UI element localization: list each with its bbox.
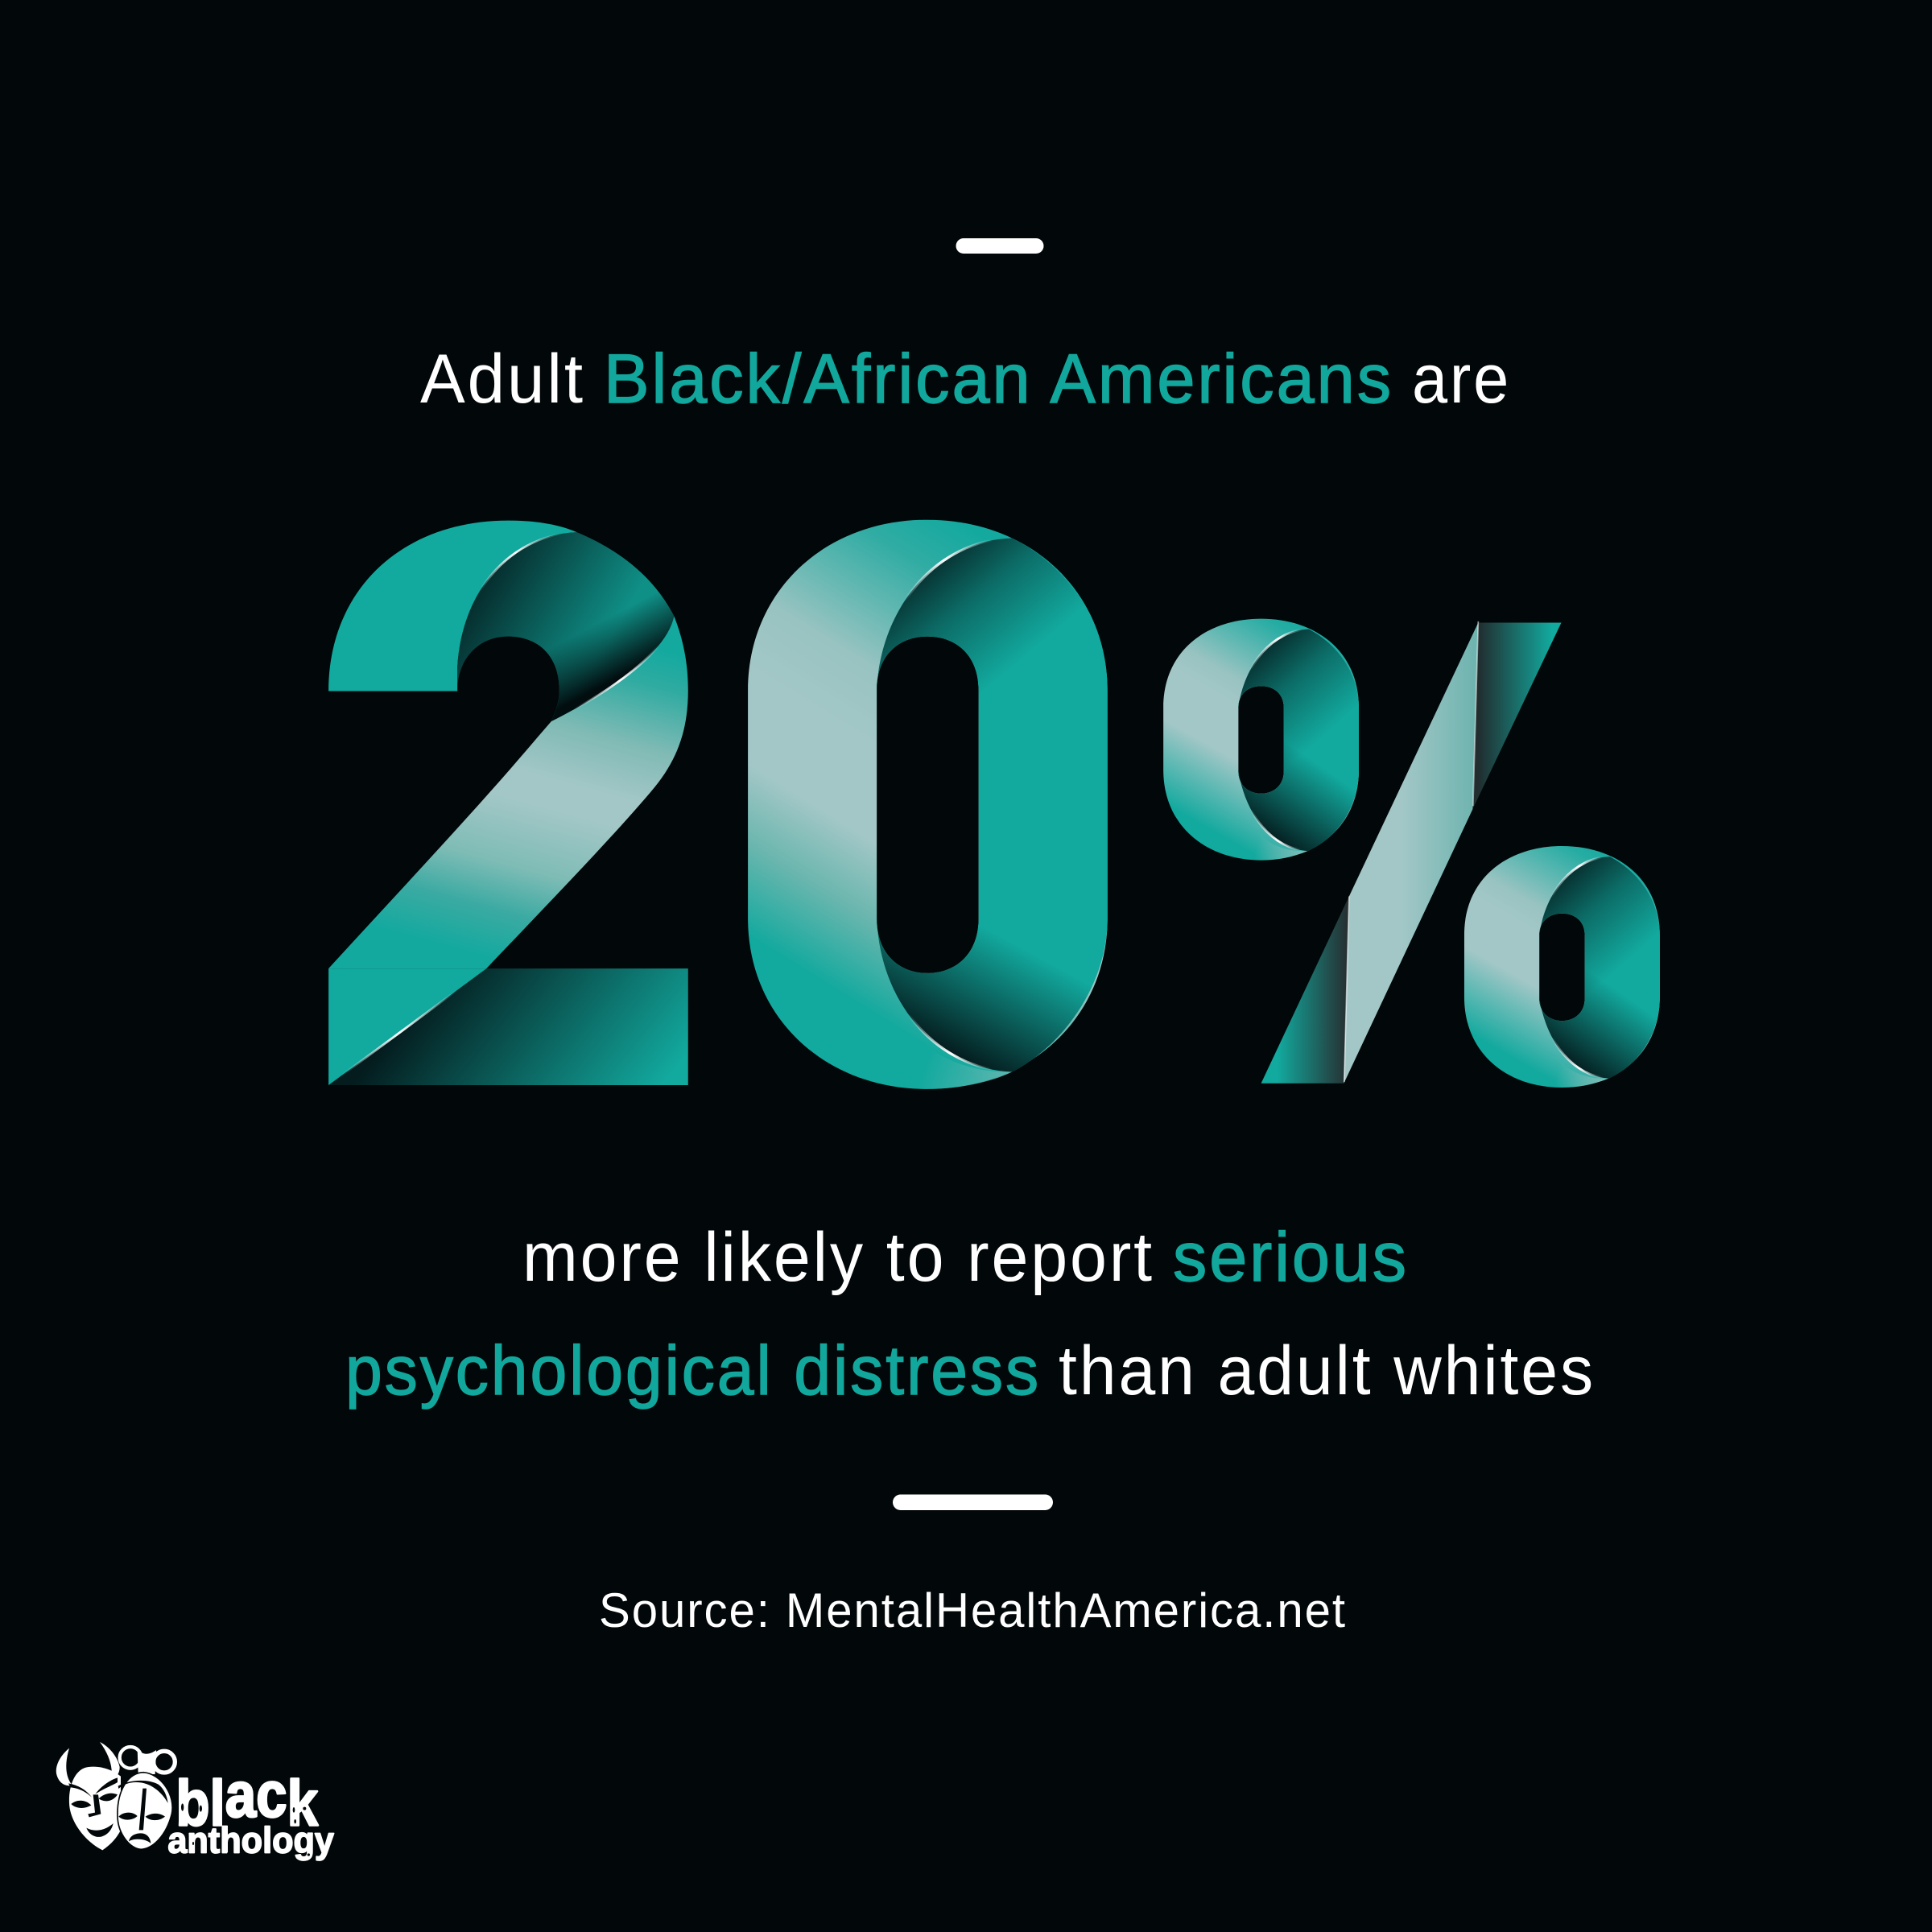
wordmark: black: k: [287, 1767, 318, 1839]
wordmark: black: ac: [225, 1759, 287, 1831]
heading line: Adult Black/African Americans are: Adult: [420, 341, 585, 418]
logo: black anthology: [56, 1742, 334, 1860]
heading line: Adult Black/African Americans are: Black/African Americans: [604, 341, 1393, 418]
body text line: psychological distress than adult whites: than adult whites: [1059, 1332, 1596, 1410]
icon: comedy mask: [56, 1742, 121, 1850]
body text line: psychological distress than adult whites: psychological distress: [345, 1332, 1041, 1410]
wordmark speckles: [181, 1803, 310, 1856]
digit 0: [748, 520, 1108, 1089]
percent: lower ring: [1464, 846, 1660, 1088]
percent: slash: [1261, 621, 1562, 1084]
digit 2: [328, 521, 688, 1085]
percent: upper ring: [1163, 619, 1359, 861]
top accent bar: [956, 238, 1043, 254]
body text line: more likely to report serious: more likely to report: [522, 1219, 1154, 1296]
percent sign: [1163, 619, 1660, 1088]
wordmark: anthology: anthology: [167, 1819, 334, 1860]
source line: Source: MentalHealthAmerica.net: [599, 1583, 1347, 1637]
icon: tragedy mask: [118, 1747, 175, 1849]
bottom accent bar: [893, 1494, 1053, 1510]
heading line: Adult Black/African Americans are: are: [1412, 341, 1511, 418]
big number: 20%: [328, 520, 1660, 1089]
body text line: more likely to report serious: serious: [1173, 1219, 1409, 1296]
body text line: psychological distress than adult whites: [345, 1332, 1596, 1410]
wordmark: black: bl: [175, 1767, 233, 1839]
